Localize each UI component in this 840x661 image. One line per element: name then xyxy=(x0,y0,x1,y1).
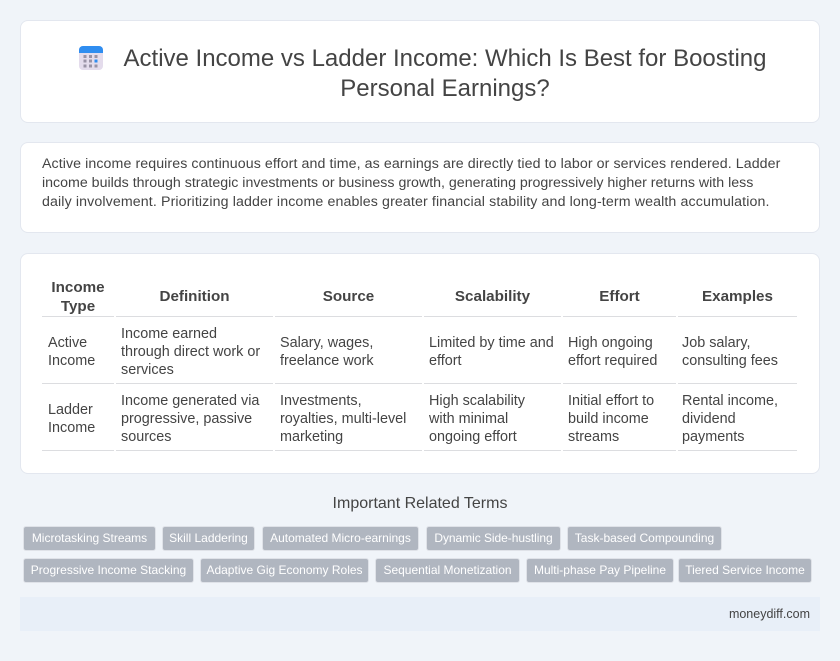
table header row: Type xyxy=(61,298,95,315)
intro text panel xyxy=(20,142,820,233)
intro paragraph: daily involvement. Prioritizing ladder income enables greater financial stability and long-term wealth accumulation. xyxy=(42,194,770,210)
row: active income: High ongoing xyxy=(568,335,653,351)
footer source: moneydiff.com xyxy=(729,607,810,621)
row: ladder income: royalties, multi-level xyxy=(280,411,406,427)
related terms tags: Task-based Compounding xyxy=(575,531,714,545)
row: ladder income: Initial effort to xyxy=(568,393,654,409)
table header row: Examples xyxy=(702,288,773,305)
row: ladder income: Ladder xyxy=(48,402,93,418)
row: active income: Active xyxy=(48,335,87,351)
row: ladder income: build income xyxy=(568,411,649,427)
related terms tags: Sequential Monetization xyxy=(383,563,512,577)
table header row: Scalability xyxy=(455,288,530,305)
table header row xyxy=(51,279,773,315)
comparison table panel xyxy=(20,253,820,474)
row: active income: Income xyxy=(48,353,95,369)
related terms tags: Progressive Income Stacking xyxy=(31,563,186,577)
row: active income: Job salary, xyxy=(682,335,751,351)
row: active income: effort required xyxy=(568,353,657,369)
table header row: Effort xyxy=(599,288,640,305)
row: active income xyxy=(48,326,778,378)
row: ladder income xyxy=(48,393,778,445)
row: ladder income: Rental income, xyxy=(682,393,778,409)
footer bar xyxy=(20,597,820,631)
row: ladder income: progressive, passive xyxy=(121,411,252,427)
title: Active Income vs Ladder Income: Which Is Best for Boosting xyxy=(124,45,766,72)
row: ladder income: Investments, xyxy=(280,393,362,409)
related terms tags: Multi-phase Pay Pipeline xyxy=(534,563,666,577)
table header row: Definition xyxy=(159,288,230,305)
related terms tags: Microtasking Streams xyxy=(32,531,147,545)
table header row: Income xyxy=(51,279,105,296)
row: ladder income: streams xyxy=(568,429,619,445)
row: ladder income: marketing xyxy=(280,429,343,445)
row: active income: Income earned xyxy=(121,326,217,342)
intro paragraph: Active income requires continuous effort and time, as earnings are directly tied to labor or services rendered. Ladder xyxy=(42,156,780,172)
row: active income: through direct work or xyxy=(121,344,260,360)
related terms heading: Important Related Terms xyxy=(333,495,507,512)
intro paragraph: income builds through strategic investments or business growth, generating progressively higher returns with less xyxy=(42,175,753,191)
row: ladder income: High scalability xyxy=(429,393,525,409)
related terms tags: Dynamic Side-hustling xyxy=(434,531,553,545)
row: ladder income: with minimal xyxy=(429,411,508,427)
row: active income: consulting fees xyxy=(682,353,778,369)
icon: calendar xyxy=(79,46,103,70)
row: active income: services xyxy=(121,362,174,378)
row: active income: Limited by time and xyxy=(429,335,554,351)
title: Personal Earnings? xyxy=(340,75,550,102)
related terms tags: Adaptive Gig Economy Roles xyxy=(206,563,363,577)
row: active income: effort xyxy=(429,353,462,369)
row: ladder income: Income generated via xyxy=(121,393,259,409)
related terms tags: Automated Micro-earnings xyxy=(270,531,411,545)
row: ladder income: ongoing effort xyxy=(429,429,517,445)
table header row: Source xyxy=(323,288,374,305)
intro paragraph xyxy=(42,156,780,210)
related terms tags: Skill Laddering xyxy=(169,531,248,545)
row: ladder income: payments xyxy=(682,429,744,445)
title xyxy=(124,45,766,102)
row: active income: Salary, wages, xyxy=(280,335,373,351)
header panel xyxy=(20,20,820,123)
row: active income: freelance work xyxy=(280,353,374,369)
related terms tags: Tiered Service Income xyxy=(685,563,805,577)
row: ladder income: Income xyxy=(48,420,95,436)
row: ladder income: dividend xyxy=(682,411,736,427)
row: ladder income: sources xyxy=(121,429,171,445)
related terms tags xyxy=(23,526,812,583)
